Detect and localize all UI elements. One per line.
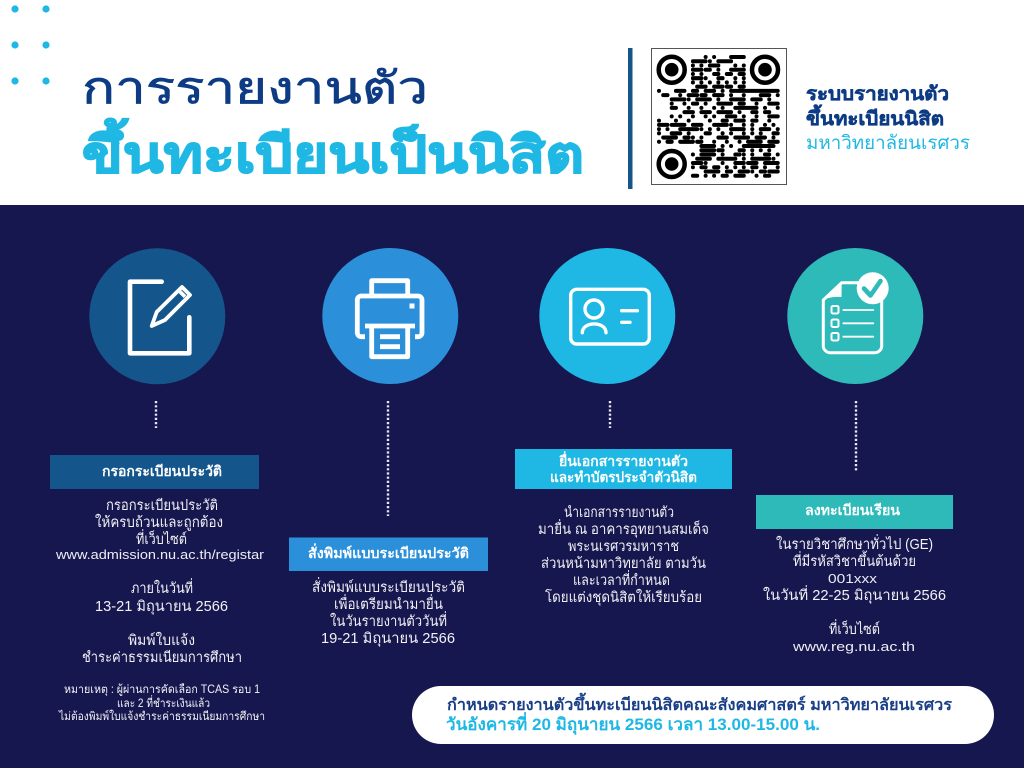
heading: step 4: ลงทะเบียนเรียน: [805, 502, 900, 518]
title: [82, 64, 584, 183]
QR caption: ระบบรายงานตัว: [806, 84, 949, 105]
text: step 1 details: พิมพ์ใบแจ้ง: [128, 631, 195, 649]
text: step 2 details: [312, 577, 465, 647]
text: step 1 details: ที่เว็บไซต์: [136, 529, 187, 548]
callout: reporting date: วันอังคารที่ 20 มิถุนายน 2566 เวลา 13.00-15.00 น.: [446, 712, 820, 735]
text: step 2 details: ในวันรายงานตัววันที่: [330, 611, 447, 630]
heading: step 3: และทำบัตรประจำตัวนิสิต: [550, 469, 697, 485]
text: step 3 details: พระนเรศวรมหาราช: [568, 539, 679, 555]
heading: step 3: [515, 449, 732, 489]
text: step 3 details: นำเอกสารรายงานตัว: [564, 505, 674, 521]
text: step 2 details: 19-21 มิถุนายน 2566: [321, 631, 455, 647]
text: step 4 details: 001xxx: [828, 571, 878, 586]
text: step 3 details: ส่วนหน้ามหาวิทยาลัย ตามวัน: [541, 555, 706, 572]
QR caption: มหาวิทยาลัยนเรศวร: [806, 133, 970, 154]
text: step 2 details: เพื่อเตรียมนำมายื่น: [334, 594, 443, 613]
QR code: [652, 48, 786, 184]
dotted connectors: [156, 401, 856, 516]
QR caption: ขึ้นทะเบียนนิสิต: [806, 104, 944, 130]
heading: step 3: ยื่นเอกสารรายงานตัว: [559, 451, 688, 469]
callout: reporting date: [412, 686, 994, 744]
title: ขึ้นทะเบียนเป็นนิสิต: [82, 118, 584, 183]
panel: step 2 print form: [289, 538, 488, 647]
text: step 4 details: ที่มีรหัสวิชาขึ้นต้นด้วย: [793, 550, 916, 570]
heading: step 2: สั่งพิมพ์แบบระเบียนประวัติ: [308, 543, 469, 561]
heading: step 1: [50, 455, 259, 489]
icon: ID card: [539, 248, 675, 384]
vertical separator: [628, 48, 632, 189]
text: step 1 details: www.admission.nu.ac.th/registar: [55, 547, 265, 562]
text: step 1 details: [55, 497, 265, 666]
text: step 4 details: ในวันที่ 22-25 มิถุนายน 2566: [763, 585, 946, 604]
text: step 1 note: และ 2 ที่ชำระเงินแล้ว: [117, 695, 210, 710]
text: step 1 details: กรอกระเบียนประวัติ: [106, 497, 218, 514]
text: step 1 details: ชำระค่าธรรมเนียมการศึกษา: [82, 649, 242, 666]
decorative dots: [11, 5, 50, 85]
text: step 2 details: สั่งพิมพ์แบบระเบียนประวัติ: [312, 577, 465, 596]
heading: step 4: [756, 495, 953, 529]
text: step 1 note: ไม่ต้องพิมพ์ใบแจ้งชำระค่าธรรมเนียมการศึกษา: [58, 709, 265, 723]
text: step 4 details: ในรายวิชาศึกษาทั่วไป (GE): [776, 534, 933, 553]
text: step 1 details: ภายในวันที่: [131, 578, 193, 597]
text: step 4 details: www.reg.nu.ac.th: [792, 639, 915, 654]
panel: step 3 submit documents: [515, 449, 732, 606]
text: step 4 details: [763, 534, 946, 654]
panel: step 1 fill in profile: [50, 455, 265, 723]
heading: step 1: กรอกระเบียนประวัติ: [102, 463, 222, 479]
icon: form and pencil: [89, 248, 225, 384]
title: การรายงานตัว: [82, 64, 428, 113]
text: step 3 details: โดยแต่งชุดนิสิตให้เรียบร้อย: [545, 588, 702, 606]
text: step 1 note: หมายเหตุ : ผู้ผ่านการคัดเลือก TCAS รอบ 1: [64, 683, 260, 696]
text: step 3 details: มายื่น ณ อาคารอุทยานสมเด็จ: [538, 519, 709, 538]
callout: reporting date: กำหนดรายงานตัวขึ้นทะเบียนนิสิตคณะสังคมศาสตร์ มหาวิทยาลัยนเรศวร: [447, 692, 952, 714]
QR caption: [806, 84, 970, 154]
icon: checklist document: [787, 248, 923, 384]
heading: step 2: [289, 538, 488, 571]
panel: step 4 course registration: [756, 495, 953, 654]
text: step 1 note: [58, 683, 265, 723]
text: step 3 details: [538, 505, 709, 606]
icon: printer: [322, 248, 458, 384]
text: step 1 details: 13-21 มิถุนายน 2566: [95, 599, 228, 615]
text: step 1 details: ให้ครบถ้วนและถูกต้อง: [95, 513, 223, 531]
text: step 3 details: และเวลาที่กำหนด: [573, 570, 670, 589]
text: step 4 details: ที่เว็บไซต์: [829, 619, 880, 638]
